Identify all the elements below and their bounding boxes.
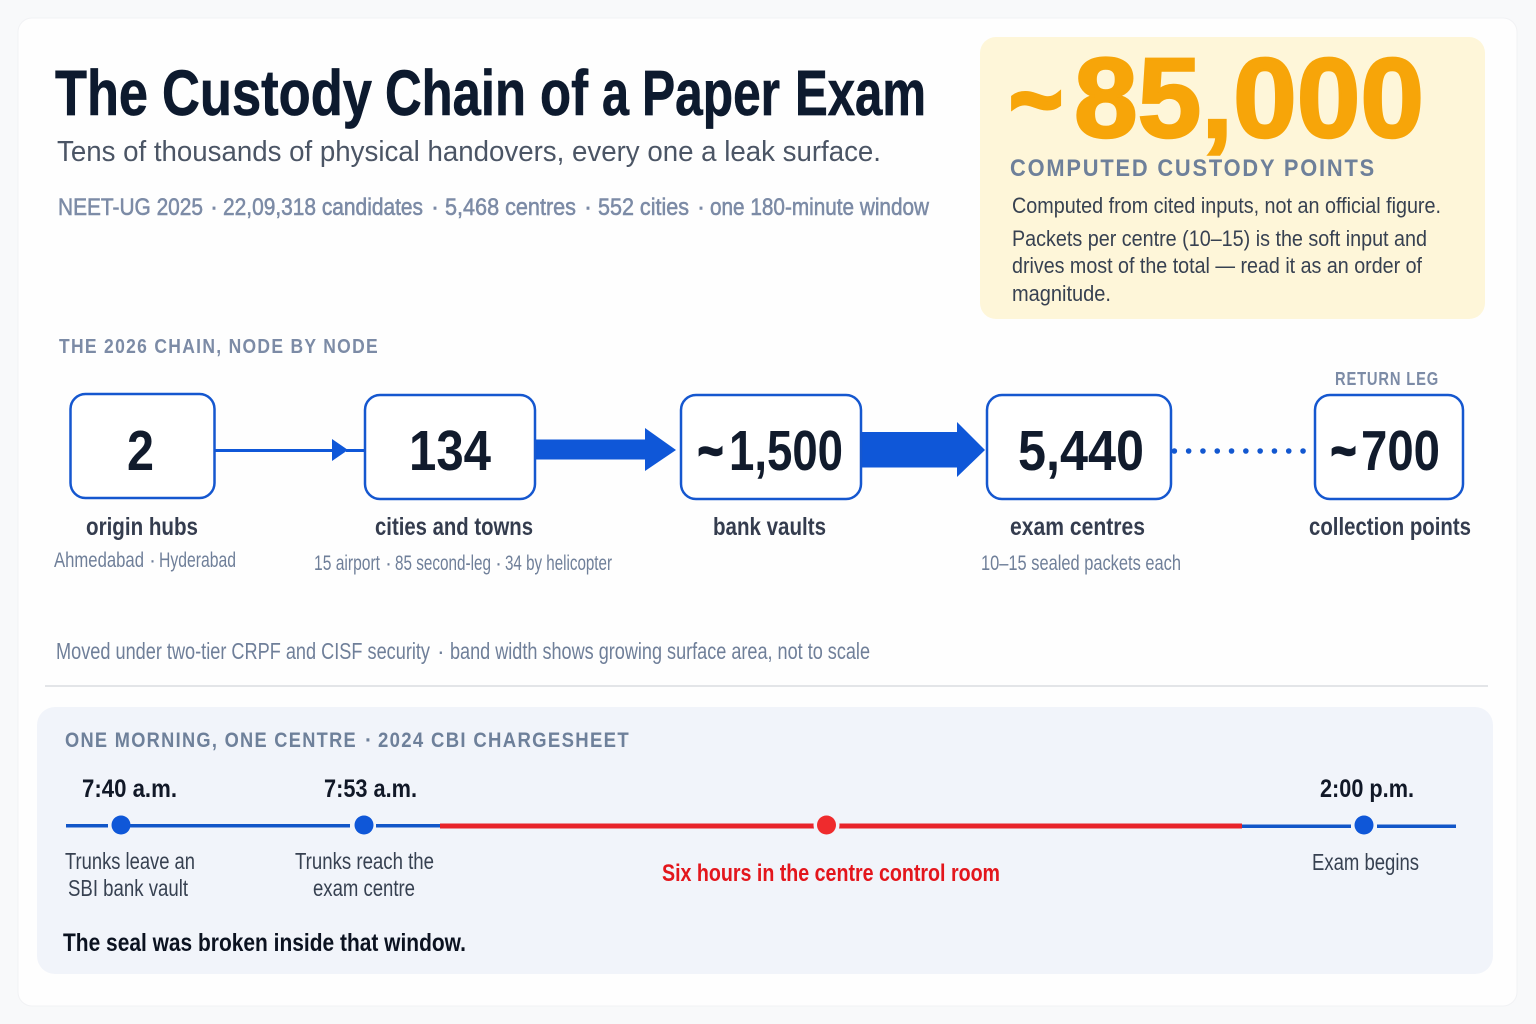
event: 7:53 a.m.: exam centre (313, 875, 415, 901)
node: collection points: 700 (1361, 419, 1440, 483)
timeline heading: · (365, 729, 374, 752)
callout heading: COMPUTED CUSTODY POINTS (1010, 155, 1376, 182)
event: 7:40 a.m.: 7:40 a.m. (82, 775, 177, 803)
scope line: one 180-minute window (710, 194, 930, 221)
timeline heading: 2024 CBI CHARGESHEET (378, 729, 630, 752)
node: origin hubs: Hyderabad (159, 549, 236, 572)
title: Paper (642, 57, 780, 129)
chain footnote: · (437, 638, 445, 664)
event: 7:53 a.m. (295, 775, 434, 901)
node: collection points: RETURN LEG (1335, 369, 1439, 389)
node: cities and towns: · (495, 552, 502, 575)
title: of (540, 57, 589, 129)
event: 7:40 a.m.: Trunks leave an (65, 848, 195, 874)
callout explanation (1012, 226, 1427, 306)
node: bank vaults (681, 395, 861, 541)
node: cities and towns: 85 second-leg (395, 552, 491, 575)
node: origin hubs (54, 394, 236, 572)
node: collection points: ~ (1331, 425, 1356, 478)
chain footnote: band width shows growing surface area, not to scale (450, 638, 870, 664)
callout explanation: Packets per centre (10–15) is the soft input and (1012, 226, 1427, 251)
node: cities and towns (314, 395, 612, 575)
node: cities and towns: 15 airport (314, 552, 380, 575)
event: 2:00 p.m.: 2:00 p.m. (1320, 775, 1414, 803)
arrow: vaults to centres (860, 422, 985, 477)
node: bank vaults: bank vaults (713, 513, 826, 541)
scope line: · (697, 194, 705, 221)
arrow: cities to vaults (534, 428, 676, 471)
big number: ~ (1010, 49, 1062, 151)
panel: computed custody points callout (980, 35, 1485, 319)
node: exam centres: 5,440 (1018, 419, 1144, 483)
chain footnote (56, 638, 870, 664)
node: cities and towns: 134 (409, 419, 491, 483)
event: 7:40 a.m.: SBI bank vault (68, 875, 188, 901)
node: bank vaults: ~ (698, 425, 723, 478)
timeline heading (65, 729, 630, 752)
subtitle: Tens of thousands of physical handovers, every one a leak surface. (57, 136, 881, 168)
node: origin hubs: origin hubs (86, 513, 198, 541)
timeline conclusion: The seal was broken inside that window. (63, 929, 466, 957)
title: Chain (385, 57, 526, 129)
scope line: NEET-UG 2025 (58, 194, 203, 221)
scope line: 5,468 centres (445, 194, 576, 221)
arrow: hubs to cities (214, 439, 366, 461)
node: collection points: collection points (1309, 513, 1471, 541)
title: a (602, 57, 629, 129)
event: 2:00 p.m.: Exam begins (1312, 849, 1419, 875)
panel: one morning timeline (37, 707, 1493, 974)
scope line: 552 cities (598, 194, 689, 221)
title (55, 57, 926, 129)
big number: 85,000 (1074, 35, 1424, 161)
scope line: · (431, 194, 439, 221)
node: exam centres: 10–15 sealed packets each (981, 552, 1181, 575)
event: six hours in control room: Six hours in the centre control room (662, 860, 1000, 887)
node: cities and towns: 34 by helicopter (505, 552, 612, 575)
node: cities and towns: cities and towns (375, 513, 533, 541)
node: cities and towns: · (385, 552, 392, 575)
timeline line (66, 812, 1456, 838)
callout explanation: magnitude. (1012, 281, 1111, 306)
callout explanation: drives most of the total — read it as an order of (1012, 253, 1423, 278)
scope line (58, 194, 930, 221)
node: origin hubs: Ahmedabad (54, 549, 144, 572)
chain footnote: Moved under two-tier CRPF and CISF security (56, 638, 430, 664)
callout note: Computed from cited inputs, not an official figure. (1012, 193, 1441, 218)
scope line: · (584, 194, 592, 221)
event: 2:00 p.m. (1312, 775, 1419, 875)
node: collection points (1309, 369, 1471, 541)
node: origin hubs: · (149, 549, 156, 572)
event: six hours in control room (662, 816, 1000, 887)
scope line: 22,09,318 candidates (223, 194, 423, 221)
title: Exam (795, 57, 926, 129)
node: exam centres (981, 395, 1181, 575)
dotted return link (1174, 448, 1304, 454)
event: 7:40 a.m. (65, 775, 195, 901)
event: 7:53 a.m.: Trunks reach the (295, 848, 434, 874)
node: origin hubs: 2 (127, 419, 154, 483)
section heading: chain: THE 2026 CHAIN, NODE BY NODE (59, 336, 379, 358)
node: bank vaults: 1,500 (729, 419, 843, 483)
title: Custody (162, 57, 372, 129)
timeline heading: ONE MORNING, ONE CENTRE (65, 729, 357, 752)
scope line: · (210, 194, 218, 221)
title: The (55, 57, 148, 129)
node: exam centres: exam centres (1010, 513, 1145, 541)
event: 7:53 a.m.: 7:53 a.m. (324, 775, 417, 803)
